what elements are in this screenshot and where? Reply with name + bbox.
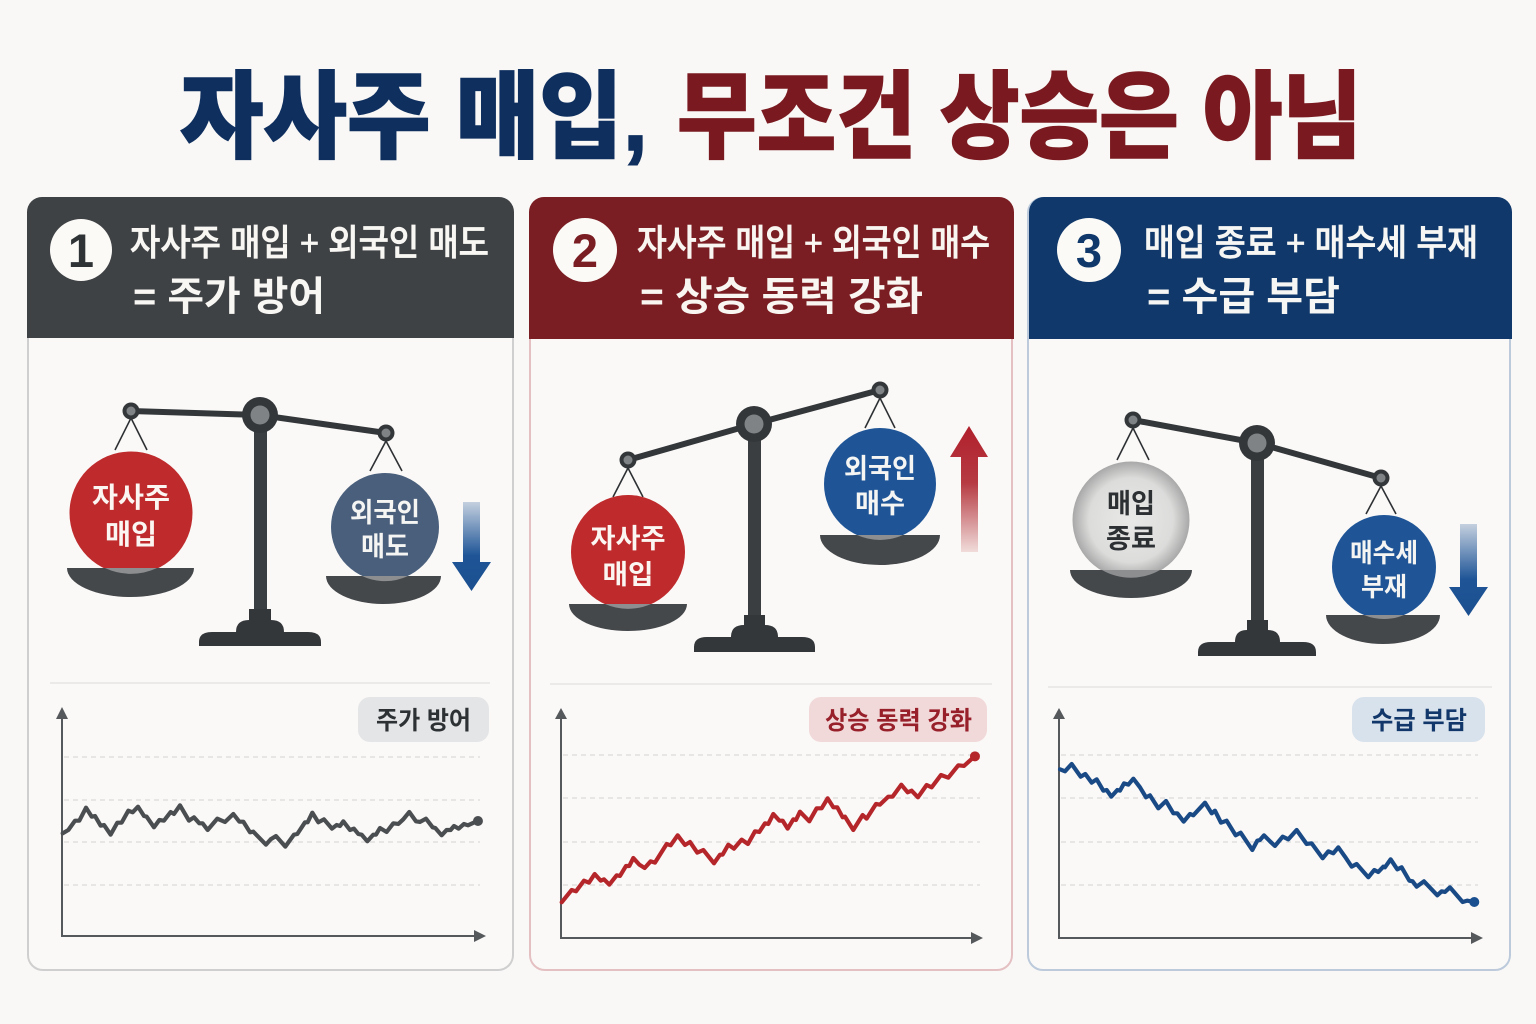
weight: 자사주 매입: 자사주 [590, 524, 666, 554]
weight: 매입 종료 [1072, 462, 1190, 578]
balance scale 1 [67, 397, 441, 646]
pan right [1326, 615, 1440, 644]
header text 1: = 주가 방어 [133, 275, 325, 319]
weight: 외국인 매수 [824, 428, 936, 540]
label pill: 주가 방어 [358, 697, 489, 742]
panel 1: buyback plus foreign selling [27, 197, 514, 970]
header text 1 [130, 222, 489, 319]
label pill: 상승 동력 강화: 상승 동력 강화 [825, 707, 972, 735]
weight: 매입 종료: 매입 [1107, 489, 1155, 519]
number badge 2: 2 [572, 224, 598, 277]
weight: 자사주 매입 [70, 452, 192, 574]
weight: 외국인 매도 [331, 473, 439, 581]
line chart 3 [1048, 687, 1492, 944]
weight: 자사주 매입: 자사주 [92, 482, 170, 513]
pan left [1070, 570, 1192, 598]
panel 3 header [1029, 197, 1512, 339]
weight: 매입 종료: 종료 [1106, 524, 1156, 554]
number badge 3: 3 [1076, 224, 1102, 277]
label pill: 수급 부담 [1352, 697, 1485, 742]
weight: 외국인 매도: 매도 [361, 532, 409, 562]
arrow down 3 [1449, 524, 1488, 616]
label pill: 수급 부담: 수급 부담 [1371, 707, 1467, 735]
number badge 1 [50, 219, 112, 281]
panel 1 header [27, 197, 514, 338]
weight: 매수세 부재: 매수세 [1350, 538, 1418, 568]
header text 3: 매입 종료 + 매수세 부재 [1144, 222, 1478, 263]
weight: 외국인 매수: 매수 [855, 489, 905, 519]
header text 2 [637, 222, 990, 319]
panel 2 header [529, 197, 1014, 339]
label pill: 주가 방어: 주가 방어 [376, 707, 471, 735]
weight: 매수세 부재: 부재 [1361, 572, 1407, 602]
weight: 자사주 매입 [571, 495, 685, 609]
balance scale 2 [569, 382, 940, 652]
line chart 1 [50, 683, 490, 942]
header text 3: = 수급 부담 [1147, 275, 1340, 319]
pan left [569, 604, 687, 631]
number badge 3 [1057, 218, 1121, 282]
balance scale 3 [1070, 412, 1440, 656]
panel 3: buyback ended, no buying [1028, 197, 1512, 970]
pan right [820, 535, 940, 565]
line chart 2 [550, 684, 992, 944]
title [180, 65, 1362, 171]
header text 2: = 상승 동력 강화 [640, 275, 923, 319]
header text 2: 자사주 매입 + 외국인 매수 [637, 222, 990, 263]
weight: 매수세 부재 [1332, 515, 1436, 619]
weight: 자사주 매입: 매입 [602, 560, 654, 590]
pan right [326, 576, 441, 604]
title: 무조건 상승은 아님 [677, 65, 1362, 171]
number badge 2 [553, 218, 617, 282]
weight: 자사주 매입: 매입 [105, 519, 157, 550]
title: 자사주 매입, [180, 65, 648, 171]
label pill: 상승 동력 강화 [809, 697, 987, 742]
arrow down 1 [452, 502, 491, 591]
pan left [67, 568, 194, 597]
weight: 외국인 매도: 외국인 [350, 498, 420, 528]
arrow up 2 [950, 426, 988, 552]
header text 1: 자사주 매입 + 외국인 매도 [130, 222, 489, 263]
header text 3 [1144, 222, 1478, 319]
weight: 외국인 매수: 외국인 [844, 454, 916, 484]
panel 2: buyback plus foreign buying [529, 197, 1014, 970]
number badge 1: 1 [68, 224, 94, 277]
